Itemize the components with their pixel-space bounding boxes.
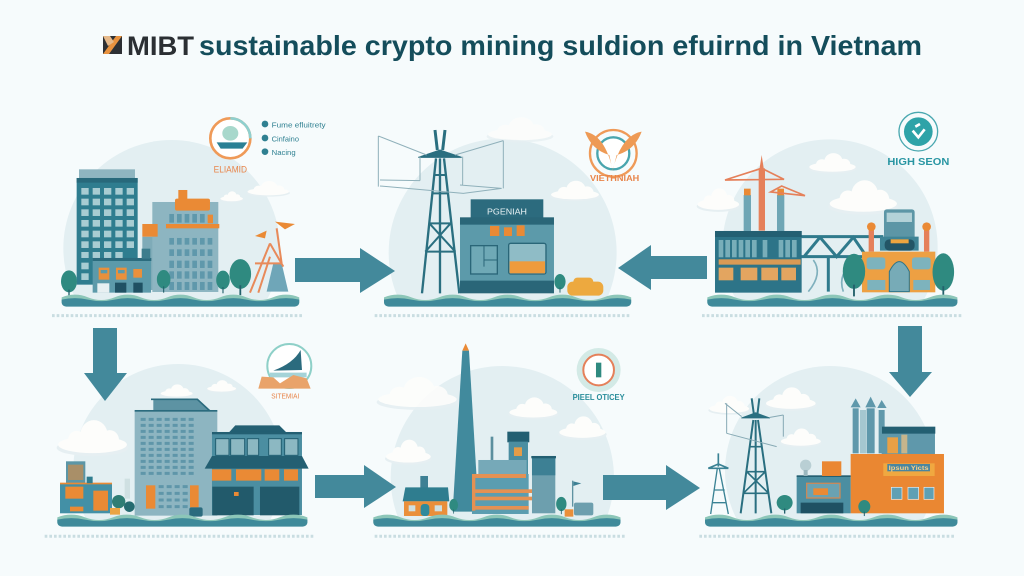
title (103, 30, 922, 61)
arrow: top right to top centre (618, 245, 707, 290)
ground strip (707, 295, 957, 307)
upper blue block (882, 427, 935, 454)
icon: title logo mark (103, 36, 122, 54)
stacks and cranes (725, 155, 805, 232)
dotted caption line (702, 311, 962, 320)
orange cottage (403, 476, 449, 516)
clouds (377, 377, 607, 465)
bridge truss (800, 237, 883, 292)
clouds (487, 117, 600, 201)
backdrop dome (64, 140, 280, 300)
two-storey shop building (205, 425, 309, 515)
ground strip (62, 295, 299, 307)
panel: top right factory and bridge (696, 112, 962, 318)
small trees and kiosk (110, 479, 203, 517)
small pylon (708, 453, 728, 514)
small orange and teal building (60, 461, 112, 513)
plant with striped block (472, 432, 543, 514)
substation building (460, 199, 554, 293)
panel: top centre pylon and substation (374, 128, 642, 318)
title brand text: MIBT (127, 31, 195, 61)
orange lattice tower (250, 222, 295, 293)
mid-rise building with orange accents (142, 190, 219, 292)
backdrop dome (74, 364, 274, 520)
badge: ELIAMID: ELIAMID (214, 165, 247, 175)
dotted caption line (375, 311, 630, 320)
ground strip (705, 515, 957, 527)
badge: PIEEL OTICEY (573, 348, 625, 402)
badge: VIETHNIAH (585, 130, 642, 183)
dotted caption line (45, 532, 314, 541)
badge: VIETHNIAH: VIETHNIAH (590, 173, 639, 183)
legend list (262, 121, 326, 157)
tall teal tower (77, 169, 138, 285)
low shopfront building (93, 249, 151, 293)
dotted caption line (375, 532, 625, 541)
ground strip (57, 515, 307, 527)
transmission tower (378, 130, 503, 293)
arrow: top left down (84, 328, 127, 401)
arrow: top left to top centre (295, 248, 395, 293)
dotted caption line (52, 311, 302, 320)
tree and orange vehicle (554, 274, 603, 296)
long factory hall (715, 231, 802, 293)
backdrop dome (390, 366, 614, 520)
badge: SITEMIAI (258, 344, 311, 400)
clouds (697, 153, 898, 215)
dotted caption line (699, 532, 955, 541)
title main text: sustainable crypto mining suldion efuirnd in Vietnam (199, 30, 922, 61)
trees (843, 253, 954, 299)
backdrop dome (388, 140, 616, 300)
large orange factory (851, 454, 944, 516)
panel: top left office district (52, 117, 326, 318)
legend list: Fume efluitrety (272, 122, 326, 129)
clouds (57, 380, 237, 456)
tree (777, 495, 793, 514)
cylindrical tank (531, 456, 556, 513)
substation sign: PGENIAH (487, 207, 527, 217)
badge: PIEEL OTICEY: PIEEL OTICEY (573, 393, 625, 402)
legend list: Cinfaino (272, 137, 299, 144)
panel: bottom right pylons and orange factory (699, 366, 958, 538)
legend list: Nacing (272, 150, 296, 157)
badge: ELIAMID (210, 118, 250, 175)
tree, flag and shed (449, 481, 593, 517)
ground strip (373, 515, 621, 527)
panel: bottom left city block (44, 343, 314, 538)
clouds (708, 387, 822, 447)
large orange factory: Ipsun Yicts (889, 465, 929, 472)
badge: HIGH SEON (887, 112, 949, 168)
trees (61, 259, 251, 297)
stacks (851, 397, 887, 453)
orange station with train (862, 209, 935, 292)
clouds (220, 181, 290, 202)
high-rise (135, 399, 217, 516)
panel: bottom centre spire and town (373, 344, 625, 538)
badge: SITEMIAI: SITEMIAI (271, 393, 299, 400)
blue annex with dish (797, 460, 851, 513)
backdrop dome (725, 366, 926, 520)
arrow: bottom left to bottom centre (315, 465, 396, 508)
badge: HIGH SEON: HIGH SEON (887, 157, 949, 168)
arrow: bottom centre to bottom right (603, 465, 700, 510)
backdrop dome (724, 140, 938, 300)
tall spire (453, 343, 479, 512)
arrow: top right down (889, 326, 932, 397)
large pylon (725, 398, 783, 513)
ground strip (384, 295, 631, 307)
